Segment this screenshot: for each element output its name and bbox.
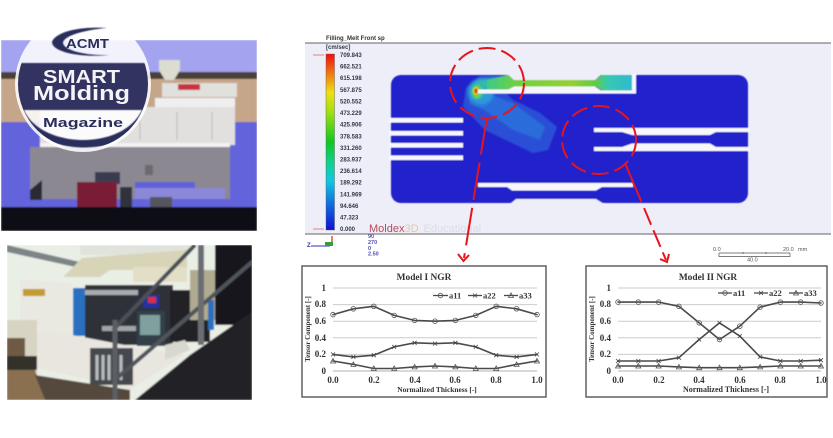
legend values: 709.843 bbox=[340, 53, 362, 59]
legend values: 0.000 bbox=[340, 227, 356, 233]
view angle values: 2.50 bbox=[368, 252, 379, 258]
x axis labels bbox=[612, 375, 827, 385]
legend colour bar bbox=[326, 54, 334, 230]
x axis labels: 0.2 bbox=[653, 375, 665, 385]
flow contour: outer bbox=[463, 76, 557, 153]
legend values: 567.875 bbox=[340, 88, 362, 94]
legend: a22 bbox=[483, 290, 496, 300]
legend values: 94.646 bbox=[340, 204, 359, 210]
highlight: thin section circle bbox=[562, 106, 636, 174]
x axis labels: 0.6 bbox=[449, 375, 461, 385]
logo swoosh bbox=[52, 28, 110, 56]
legend values: 141.969 bbox=[340, 192, 362, 198]
view angle values: 0 bbox=[368, 246, 371, 252]
series a11 bbox=[333, 306, 537, 321]
y axis labels bbox=[600, 283, 612, 376]
scale bar: 0.0 bbox=[713, 247, 721, 253]
arrow: thin section to Model II chart bbox=[625, 163, 669, 262]
y axis labels: 1 bbox=[606, 283, 612, 293]
series a22 bbox=[618, 323, 821, 361]
y axis labels: 0 bbox=[606, 366, 612, 376]
legend values: 283.937 bbox=[340, 158, 362, 164]
legend values: 520.552 bbox=[340, 99, 362, 105]
legend values: 47.323 bbox=[340, 216, 359, 222]
scale bar bbox=[713, 247, 808, 264]
legend: a33 bbox=[519, 290, 532, 300]
chart title: Model II NGR bbox=[679, 273, 737, 283]
legend bbox=[718, 288, 817, 298]
y axis labels: 0.8 bbox=[315, 299, 326, 309]
legend values: 378.583 bbox=[340, 134, 362, 140]
legend pointers bbox=[313, 55, 324, 229]
legend: a11 bbox=[733, 288, 745, 298]
x axis labels: 0.2 bbox=[368, 375, 380, 385]
y axis labels: 0.8 bbox=[600, 299, 612, 309]
view angle values bbox=[368, 234, 379, 258]
y axis title: Tensor Component [-] bbox=[304, 296, 312, 362]
x axis title: Normalized Thickness [-] bbox=[683, 385, 769, 394]
mold plate with flow field bbox=[389, 74, 750, 204]
y axis labels: 0.6 bbox=[600, 316, 612, 326]
logo text: ACMT: ACMT bbox=[66, 36, 109, 51]
legend values: 425.906 bbox=[340, 123, 362, 129]
arrow: gate region to Model I chart bbox=[458, 117, 487, 261]
y axis labels: 0.4 bbox=[315, 333, 326, 343]
x axis labels: 1.0 bbox=[531, 375, 543, 385]
panel: Moldex3D flow simulation bbox=[305, 36, 831, 235]
series a33 bbox=[618, 366, 821, 368]
x axis labels: 0.8 bbox=[490, 375, 502, 385]
flow contour: gate region bbox=[468, 79, 494, 105]
legend: a11 bbox=[449, 290, 461, 300]
chart title: Model I NGR bbox=[397, 273, 452, 283]
x axis labels bbox=[327, 375, 543, 385]
chart: Model II NGR bbox=[586, 266, 827, 397]
view angle values: 90 bbox=[368, 234, 374, 240]
legend values: 615.198 bbox=[340, 76, 362, 82]
legend unit: [cm/sec] bbox=[326, 45, 350, 51]
y axis title: Tensor Component [-] bbox=[588, 296, 596, 362]
legend values bbox=[340, 53, 362, 233]
logo text: Molding: Molding bbox=[33, 83, 130, 105]
y axis labels: 0.2 bbox=[600, 349, 612, 359]
logo text: Magazine: Magazine bbox=[43, 116, 123, 130]
legend: a33 bbox=[804, 288, 817, 298]
simulation title: Filling_Melt Front sp bbox=[326, 36, 385, 42]
legend: a22 bbox=[769, 288, 782, 298]
view angle values: 270 bbox=[368, 240, 377, 246]
x axis labels: 0.0 bbox=[612, 375, 624, 385]
highlight: gate region circle bbox=[450, 48, 524, 118]
y axis labels: 1 bbox=[322, 283, 326, 293]
axis triad: Z bbox=[307, 243, 311, 249]
logo: ACMT SMART Molding Magazine badge bbox=[14, 16, 152, 152]
x axis labels: 0.8 bbox=[774, 375, 786, 385]
filled dogbone strip bbox=[487, 75, 632, 90]
scale bar: mm bbox=[798, 247, 808, 253]
y axis labels: 0 bbox=[322, 366, 326, 376]
x axis labels: 1.0 bbox=[815, 375, 827, 385]
legend values: 473.229 bbox=[340, 111, 362, 117]
y axis labels bbox=[315, 283, 326, 376]
x axis labels: 0.4 bbox=[693, 375, 705, 385]
scale bar: 40.0 bbox=[747, 258, 758, 264]
flow contour: inner bbox=[468, 92, 545, 140]
mold plate cut-outs bbox=[389, 74, 750, 204]
watermark: Moldex3D Educational: Moldex3D Educational bbox=[369, 223, 481, 235]
series a22 bbox=[333, 343, 537, 357]
photo: industrial injection molding machine bbox=[7, 245, 252, 400]
y axis labels: 0.6 bbox=[315, 316, 326, 326]
y axis labels: 0.2 bbox=[315, 349, 326, 359]
series a33 bbox=[333, 361, 537, 368]
legend values: 189.292 bbox=[340, 181, 362, 187]
logo text: SMART: SMART bbox=[43, 67, 120, 87]
x axis labels: 0.0 bbox=[327, 375, 339, 385]
x axis labels: 0.6 bbox=[734, 375, 746, 385]
chart: Model I NGR bbox=[302, 266, 546, 397]
axis triad bbox=[307, 236, 333, 249]
x axis labels: 0.4 bbox=[409, 375, 421, 385]
scale bar: 20.0 bbox=[783, 247, 794, 253]
series a11 bbox=[618, 302, 821, 340]
legend values: 662.521 bbox=[340, 65, 362, 71]
legend values: 331.260 bbox=[340, 146, 362, 152]
photo: desktop injection molding machine bbox=[1, 40, 257, 231]
x axis title: Normalized Thickness [-] bbox=[397, 385, 477, 394]
legend bbox=[433, 290, 532, 300]
y axis labels: 0.4 bbox=[600, 333, 612, 343]
legend values: 236.614 bbox=[340, 169, 362, 175]
